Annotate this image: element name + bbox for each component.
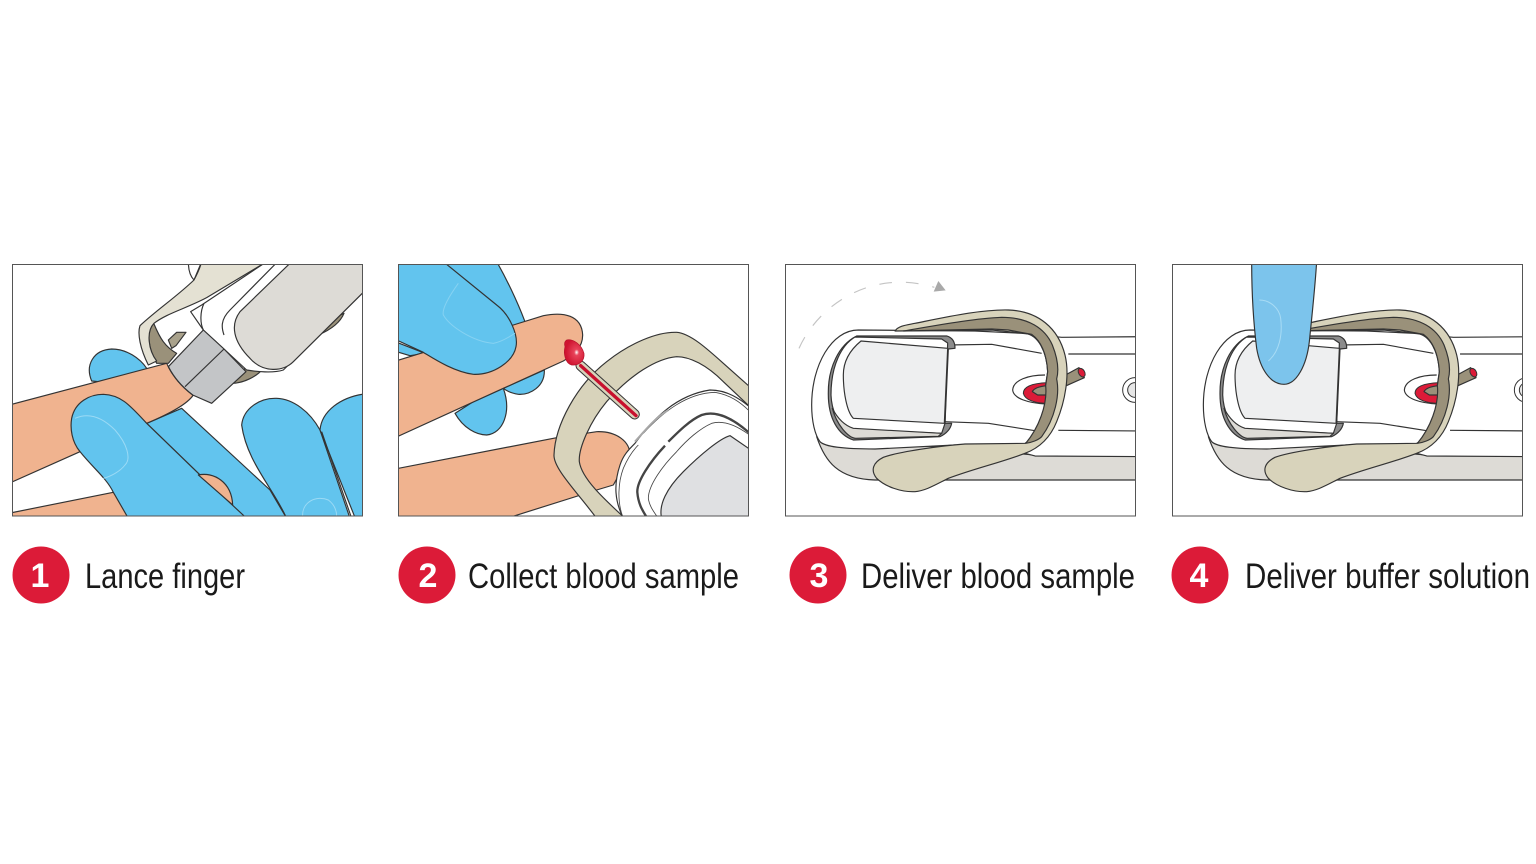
beige cap ring <box>554 332 753 518</box>
step 1 label <box>12 546 245 604</box>
lower blue pads <box>455 370 544 435</box>
device gray cylinder <box>234 262 367 369</box>
device white body <box>812 330 1148 457</box>
device dark ring <box>637 414 752 518</box>
capillary tube <box>581 366 636 416</box>
lower peach finger <box>397 432 630 518</box>
white tab beside cap <box>188 265 200 280</box>
panel 3 frame <box>786 264 1136 516</box>
device lower shell <box>817 437 1148 480</box>
beige cap <box>873 310 1067 492</box>
device body <box>616 390 753 518</box>
nail outline right <box>303 498 337 517</box>
olive cap band <box>1295 317 1449 443</box>
panel 2 frame <box>398 264 748 516</box>
gray tray <box>828 336 955 440</box>
sample hole outline <box>1013 375 1047 404</box>
cap small tab <box>168 332 186 348</box>
panel 3: deliver blood sample <box>786 264 1148 516</box>
step 1 label: Lance finger <box>85 557 245 596</box>
right blue finger B <box>320 394 367 518</box>
panel 1 frame <box>12 264 362 516</box>
tray white recess <box>1223 337 1339 433</box>
front blue finger <box>397 262 516 374</box>
blue thumb behind <box>147 408 287 518</box>
peach finger <box>7 363 193 484</box>
rail lines <box>1336 344 1536 431</box>
round port <box>1514 378 1536 402</box>
nail outline <box>443 283 515 343</box>
step 2 label: Collect blood sample <box>468 557 739 596</box>
step 3 label: 3 <box>810 557 828 595</box>
step 2 label: 2 <box>419 557 437 595</box>
back blue fingertip <box>89 349 147 385</box>
upper peach finger <box>397 314 583 437</box>
small blue under top hand <box>399 342 422 356</box>
tray lower strip <box>832 408 942 438</box>
curved dashed arrow <box>799 281 946 348</box>
front blue finger <box>71 394 247 518</box>
device gray arc accent <box>635 410 668 442</box>
red sample port <box>1023 383 1048 403</box>
gray tray <box>1220 336 1347 440</box>
blood drop <box>564 340 584 365</box>
device white housing <box>190 265 288 372</box>
tray lower strip <box>1224 408 1333 438</box>
step 2 label <box>398 546 739 604</box>
round port <box>1123 378 1147 402</box>
sample hole outline <box>1404 375 1438 404</box>
lower peach finger <box>13 492 126 516</box>
panel 1: lance finger <box>7 262 367 522</box>
rail lines <box>944 344 1148 431</box>
olive cap band <box>903 317 1058 443</box>
cap beige arm <box>139 262 267 365</box>
step 3 label <box>790 546 1135 604</box>
step 4 label <box>1172 546 1530 604</box>
olive pin <box>1424 386 1439 395</box>
nail outline left <box>75 416 128 478</box>
device lower shell <box>1208 437 1536 480</box>
step 4 label: 4 <box>1190 557 1209 595</box>
beige cap <box>1265 310 1459 492</box>
stub with red end <box>1456 367 1478 386</box>
peach fingertip nub <box>198 474 233 505</box>
step 3 label: Deliver blood sample <box>861 557 1135 596</box>
device inner line <box>201 264 275 335</box>
panel 4: deliver buffer solution <box>1172 262 1536 516</box>
panel 4 frame <box>1172 264 1522 516</box>
step 1 label: 1 <box>31 557 49 595</box>
peach finger front edge <box>168 367 193 395</box>
device gray window <box>661 436 753 518</box>
light window <box>1235 341 1339 423</box>
finger nail outline <box>1259 300 1281 361</box>
right blue finger A <box>242 398 350 518</box>
panel 2: collect blood sample <box>397 262 753 518</box>
device white body <box>1203 330 1536 457</box>
red sample port <box>1415 383 1439 403</box>
back blue finger <box>448 265 526 325</box>
device thin rings <box>619 392 752 518</box>
light window <box>843 341 948 423</box>
cap olive band <box>149 324 177 363</box>
pressing blue finger <box>1252 262 1317 384</box>
olive pin <box>1032 386 1048 395</box>
stub with red end <box>1064 367 1087 386</box>
gray lancet blade <box>168 330 246 403</box>
tray white recess <box>831 337 948 433</box>
device brown collar <box>232 313 344 383</box>
